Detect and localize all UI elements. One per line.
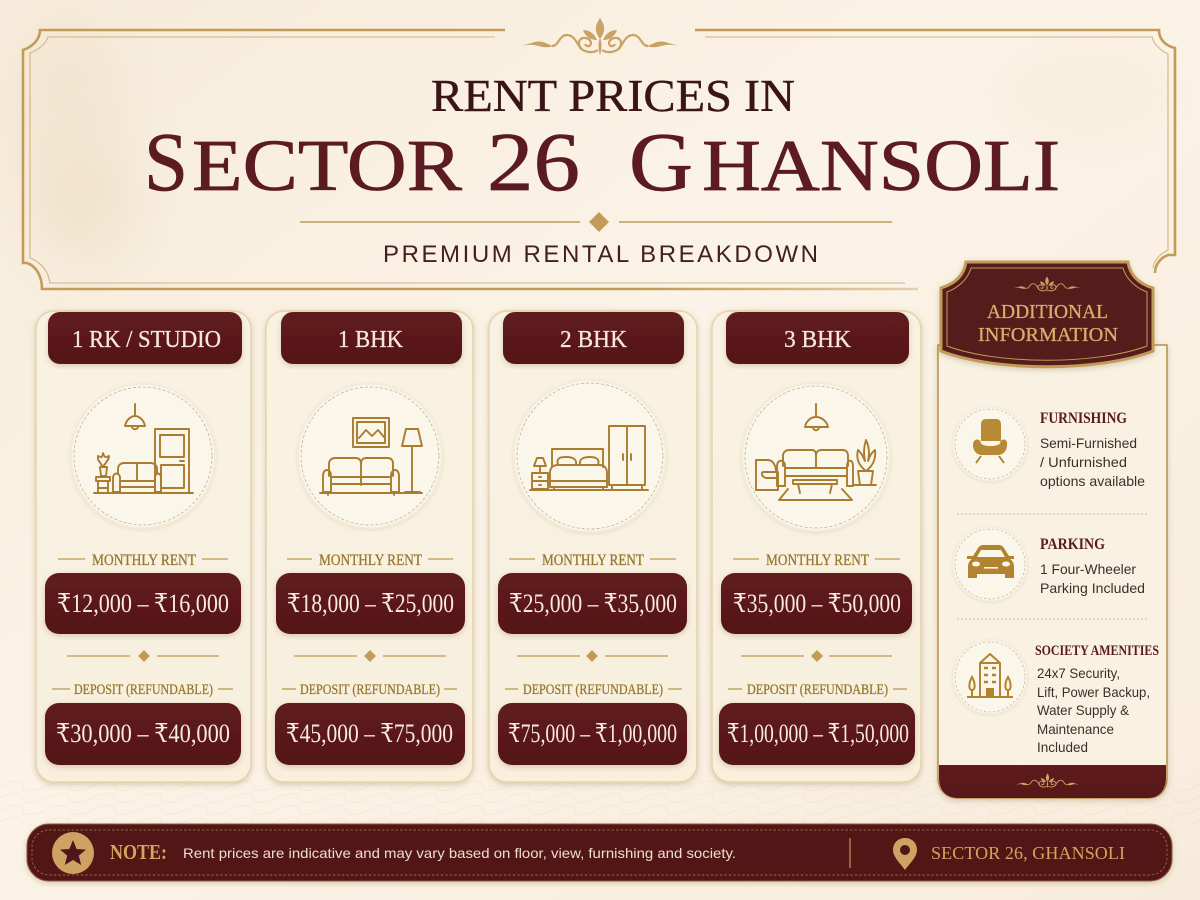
ornament: top flourish — [522, 18, 678, 55]
icon: armchair — [953, 407, 1027, 481]
deposit price: ₹30,000 – ₹40,000 — [56, 719, 230, 748]
panel: 3 BHK — [712, 311, 921, 782]
tab: 3 BHK — [726, 312, 909, 364]
title line one: RENT PRICES IN — [431, 71, 795, 121]
note label: NOTE: — [110, 840, 167, 864]
rent price — [45, 573, 241, 634]
item: society amenities: 24x7 Security, — [1037, 665, 1120, 681]
deposit price: ₹45,000 – ₹75,000 — [286, 719, 453, 748]
label: deposit: DEPOSIT (REFUNDABLE) — [523, 682, 663, 698]
tab: 1 BHK — [281, 312, 462, 364]
item: furnishing: FURNISHING — [1040, 410, 1127, 427]
item: society amenities — [953, 640, 1159, 755]
icon: car — [953, 527, 1027, 601]
label: deposit: DEPOSIT (REFUNDABLE) — [747, 682, 888, 698]
tab: 2 BHK — [503, 312, 684, 364]
item: furnishing: / Unfurnished — [1040, 454, 1127, 470]
icon: studio room — [71, 384, 215, 528]
tab: 1 RK / Studio — [48, 312, 242, 364]
label: monthly rent: MONTHLY RENT — [542, 552, 644, 569]
label: deposit: DEPOSIT (REFUNDABLE) — [300, 682, 440, 698]
subtitle: PREMIUM RENTAL BREAKDOWN — [383, 241, 818, 268]
plaque: additional information heading: ADDITIONAL — [987, 301, 1108, 323]
item: parking: Parking Included — [1040, 580, 1145, 596]
label: monthly rent: MONTHLY RENT — [766, 552, 869, 569]
tab: 3 BHK: 3 BHK — [784, 327, 852, 353]
deposit price — [275, 703, 465, 765]
deposit price: ₹1,00,000 – ₹1,50,000 — [727, 719, 909, 748]
panel: additional information — [938, 262, 1167, 798]
icon: location pin — [893, 838, 917, 870]
item: parking: PARKING — [1040, 536, 1105, 553]
rent price — [276, 573, 465, 634]
rent price: ₹18,000 – ₹25,000 — [287, 589, 454, 618]
icon: living room — [298, 384, 442, 528]
deposit price: ₹75,000 – ₹1,00,000 — [508, 719, 677, 748]
title line two — [144, 116, 1060, 209]
plaque: additional information heading — [941, 262, 1153, 367]
item: furnishing: Semi-Furnished — [1040, 435, 1137, 451]
rent price — [498, 573, 687, 634]
rent price: ₹25,000 – ₹35,000 — [509, 589, 677, 618]
rent price: ₹12,000 – ₹16,000 — [57, 589, 229, 618]
rent price: ₹35,000 – ₹50,000 — [733, 589, 901, 618]
icon: large living room — [742, 383, 890, 531]
deposit price — [45, 703, 241, 765]
title line two: 26 — [487, 116, 580, 209]
tab: 1 RK / Studio: 1 RK / STUDIO — [72, 327, 221, 353]
note text: Rent prices are indicative and may vary based on floor, view, furnishing and society. — [183, 845, 736, 861]
item: society amenities: Water Supply & — [1037, 702, 1130, 718]
panel: 1 RK / Studio — [36, 311, 251, 782]
label: deposit: DEPOSIT (REFUNDABLE) — [74, 682, 213, 698]
label: monthly rent: MONTHLY RENT — [319, 552, 422, 569]
icon: bedroom — [514, 380, 666, 532]
note bar — [27, 824, 1172, 881]
item: parking: 1 Four-Wheeler — [1040, 561, 1136, 577]
panel: 1 BHK — [266, 311, 473, 782]
item: society amenities: SOCIETY AMENITIES — [1035, 643, 1159, 659]
tab: 1 BHK: 1 BHK — [338, 327, 404, 353]
title line two: S — [144, 116, 188, 209]
title line two: HANSOLI — [702, 125, 1060, 206]
deposit price — [719, 703, 915, 765]
item: parking — [953, 527, 1145, 601]
item: society amenities: Included — [1037, 739, 1088, 755]
rent price — [721, 573, 912, 634]
title divider — [300, 212, 892, 232]
item: society amenities: Lift, Power Backup, — [1037, 684, 1150, 700]
plaque: additional information heading: INFORMATION — [978, 324, 1118, 346]
header frame — [23, 30, 1175, 289]
deposit price — [498, 703, 687, 765]
title line two: G — [629, 116, 693, 209]
tab: 2 BHK: 2 BHK — [560, 327, 628, 353]
item: furnishing: options available — [1040, 473, 1145, 489]
item: society amenities: Maintenance — [1037, 721, 1114, 737]
panel footer band — [939, 765, 1166, 798]
panel: 2 BHK — [489, 311, 697, 782]
icon: building and trees — [953, 640, 1027, 714]
label: monthly rent: MONTHLY RENT — [92, 552, 196, 569]
item: furnishing — [953, 407, 1145, 489]
icon: star badge — [52, 832, 94, 874]
title line two: ECTOR — [192, 125, 462, 206]
location text: SECTOR 26, GHANSOLI — [931, 843, 1125, 863]
